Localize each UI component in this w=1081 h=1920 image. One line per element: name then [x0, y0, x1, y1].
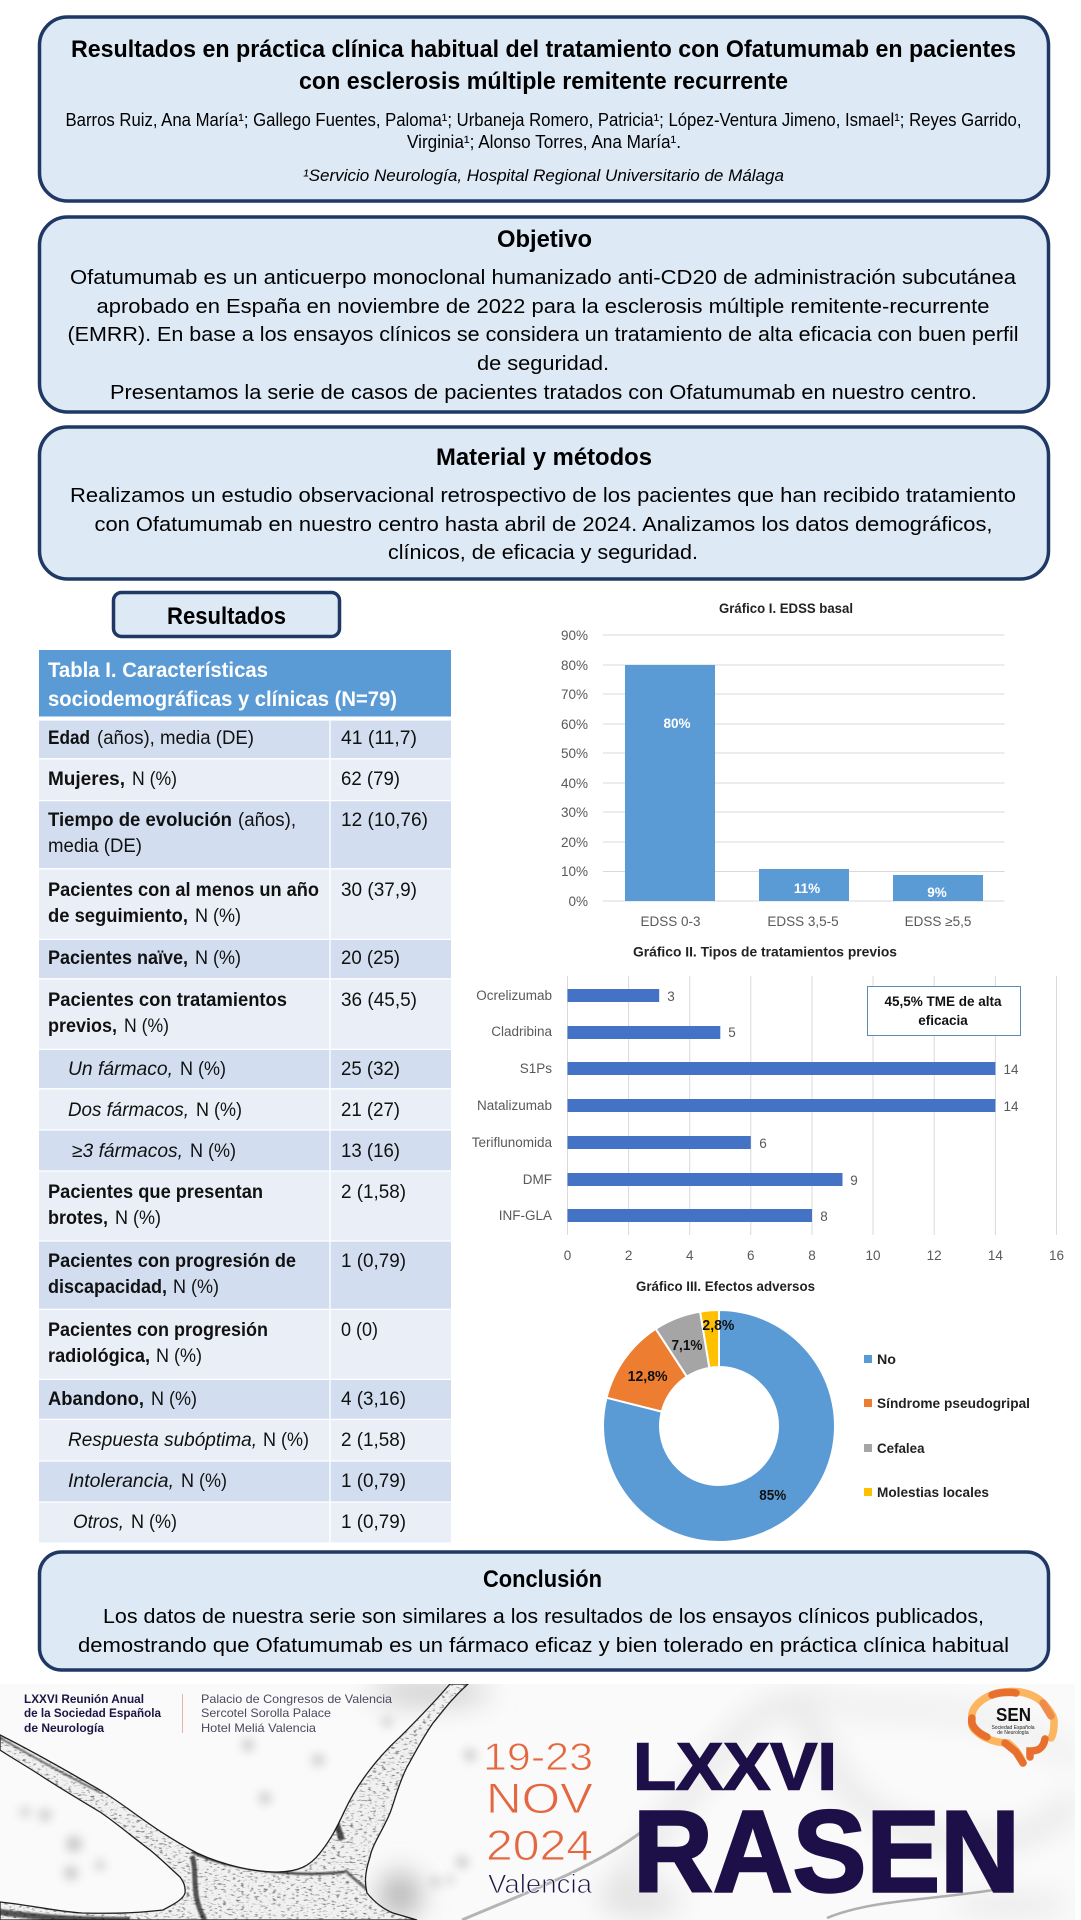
chart: EDSS basal: 70% — [561, 687, 588, 702]
text: LXXVI RASEN: LXXVI — [633, 1730, 837, 1804]
row labels: N (%) — [115, 1208, 161, 1229]
row labels: N (%) — [173, 1277, 219, 1298]
row labels — [48, 728, 319, 1533]
value labels: 8 — [820, 1209, 828, 1224]
row values: 1 (0,79) — [341, 1512, 406, 1533]
row labels: Un fármaco, — [68, 1059, 173, 1080]
x axis labels: 2 — [625, 1248, 632, 1263]
legend: No — [877, 1351, 896, 1367]
text block: authors — [66, 110, 1022, 152]
donut labels: 2,8% — [702, 1318, 734, 1334]
chart: efectos adversos — [603, 1279, 1030, 1542]
row labels: N (%) — [156, 1346, 202, 1367]
value labels — [667, 989, 1019, 1224]
row labels: radiológica, — [48, 1346, 150, 1367]
row labels: Mujeres, — [48, 769, 125, 790]
text block: objetivo — [68, 266, 1019, 404]
heading: resultados: Resultados — [167, 603, 286, 630]
donut labels — [628, 1318, 786, 1504]
row labels: N (%) — [190, 1141, 236, 1162]
x axis labels: 8 — [808, 1248, 816, 1263]
legend: Molestias locales — [877, 1484, 989, 1500]
callout: TME de alta eficacia: eficacia — [918, 1013, 968, 1028]
category labels: Ocrelizumab — [476, 988, 552, 1003]
row labels: N (%) — [132, 769, 177, 790]
text: dates: 19-23 — [483, 1736, 593, 1779]
row values: 25 (32) — [341, 1059, 400, 1080]
row labels: N (%) — [195, 906, 241, 927]
chart title: Gráfico III. Efectos adversos — [636, 1279, 815, 1294]
chart: EDSS basal: 80% — [561, 658, 588, 673]
row labels: Pacientes con progresión de — [48, 1251, 296, 1272]
row labels: Pacientes naïve, — [48, 948, 188, 969]
text block: objetivo: de seguridad. — [477, 352, 609, 375]
row labels: N (%) — [151, 1389, 197, 1410]
text: venues — [202, 1694, 392, 1732]
table header — [39, 650, 451, 716]
text block: material y metodos: clínicos, de eficacia y seguridad. — [388, 541, 698, 564]
donut labels: 85% — [759, 1488, 786, 1504]
heading: title: Resultados en práctica clínica habitual del tratamiento con Ofatumumab en pacientes — [71, 36, 1016, 63]
chart title: Gráfico I. EDSS basal — [719, 601, 853, 616]
row values: 30 (37,9) — [341, 880, 417, 901]
row labels: Dos fármacos, — [68, 1100, 189, 1121]
donut labels: 7,1% — [672, 1338, 703, 1354]
data labels: 11% — [794, 881, 820, 896]
chart: EDSS basal: 50% — [561, 746, 588, 761]
text: dates: NOV — [486, 1775, 593, 1823]
category labels: DMF — [523, 1172, 552, 1187]
text block: material y metodos — [70, 484, 1016, 564]
row labels: Abandono, — [48, 1389, 144, 1410]
text block: objetivo: (EMRR). En base a los ensayos clínicos se considera un tratamiento de alta eficacia con buen perfil — [68, 323, 1019, 346]
heading: title: con esclerosis múltiple remitente recurrente — [299, 68, 788, 95]
row values: 2 (1,58) — [341, 1182, 406, 1203]
row values: 1 (0,79) — [341, 1251, 406, 1272]
text block: affiliation: ¹Servicio Neurología, Hospital Regional Universitario de Málaga — [303, 166, 784, 185]
text block: objetivo: Ofatumumab es un anticuerpo monoclonal humanizado anti-CD20 de administración subcutánea — [70, 266, 1017, 289]
category labels: Cladribina — [491, 1024, 552, 1039]
heading: material y metodos: Material y métodos — [436, 444, 652, 471]
x axis labels: 12 — [927, 1248, 942, 1263]
row values: 1 (0,79) — [341, 1471, 406, 1492]
text: meeting name: LXXVI Reunión Anual — [24, 1692, 144, 1706]
callout: TME de alta eficacia: 45,5% TME de alta — [884, 994, 1002, 1009]
category labels: Teriflunomida — [472, 1135, 552, 1150]
x axis labels: 6 — [747, 1248, 755, 1263]
icon: SEN logo: de Neurología — [997, 1730, 1029, 1736]
table header: sociodemográficas y clínicas (N=79) — [48, 688, 397, 711]
row labels: Pacientes que presentan — [48, 1182, 263, 1203]
heading: objetivo: Objetivo — [497, 226, 592, 253]
text: dates: Valencia — [488, 1869, 593, 1899]
row labels: Pacientes con al menos un año — [48, 880, 319, 901]
row labels: N (%) — [180, 1059, 226, 1080]
row values: 20 (25) — [341, 948, 400, 969]
table: caracteristicas — [39, 650, 451, 1542]
row labels: Edad — [48, 728, 90, 749]
row values: 36 (45,5) — [341, 990, 417, 1011]
text: venues: Hotel Meliá Valencia — [201, 1721, 316, 1735]
text block: conclusion — [78, 1605, 1009, 1657]
row values — [341, 728, 428, 1533]
value labels: 5 — [728, 1025, 736, 1040]
text: meeting name: de Neurología — [24, 1721, 104, 1735]
text: meeting name — [24, 1692, 161, 1735]
row labels: (años), — [238, 810, 296, 831]
row labels: N (%) — [195, 948, 241, 969]
text: dates: 2024 — [486, 1822, 593, 1870]
value labels: 14 — [1003, 1099, 1019, 1114]
heading: resultados — [114, 592, 340, 636]
category labels: Natalizumab — [477, 1098, 552, 1113]
text: LXXVI RASEN — [636, 1742, 1014, 1894]
panel: objetivo — [40, 217, 1048, 412]
text block: authors: Barros Ruiz, Ana María¹; Gallego Fuentes, Paloma¹; Urbaneja Romero, Patricia¹; López-Ventura Jimeno, Ismael¹; Reyes Garrido, — [66, 110, 1022, 130]
row values: 13 (16) — [341, 1141, 400, 1162]
value labels: 14 — [1003, 1062, 1019, 1077]
row values: 0 (0) — [341, 1320, 378, 1341]
x axis labels — [564, 1248, 1064, 1263]
chart: EDSS basal — [561, 601, 1004, 929]
x axis labels: 14 — [988, 1248, 1003, 1263]
data labels: 80% — [663, 716, 691, 731]
text: venues: Sercotel Sorolla Palace — [201, 1706, 331, 1720]
category labels — [472, 988, 552, 1223]
chart: EDSS basal: 10% — [561, 864, 588, 879]
icon: neuron — [0, 1684, 993, 1920]
row values: 2 (1,58) — [341, 1430, 406, 1451]
legend — [864, 1351, 1030, 1500]
text: venues: Palacio de Congresos de Valencia — [201, 1692, 392, 1706]
heading: title — [71, 36, 1016, 95]
chart: EDSS basal: 60% — [561, 717, 588, 732]
icon: SEN logo: SEN — [996, 1705, 1031, 1725]
category labels: S1Ps — [520, 1061, 552, 1076]
row labels: previos, — [48, 1016, 117, 1037]
text block: objetivo: Presentamos la serie de casos de pacientes tratados con Ofatumumab en nuestro centro. — [110, 381, 977, 404]
row labels: Pacientes con progresión — [48, 1320, 268, 1341]
x axis labels: 16 — [1049, 1248, 1064, 1263]
bars — [625, 665, 983, 901]
x axis labels: 4 — [686, 1248, 694, 1263]
text block: conclusion: demostrando que Ofatumumab es un fármaco eficaz y bien tolerado en práctica clínica habitual — [78, 1634, 1009, 1657]
text: dates — [486, 1743, 592, 1894]
chart: EDSS basal: 20% — [561, 835, 588, 850]
data labels: 9% — [927, 885, 947, 900]
row values: 62 (79) — [341, 769, 400, 790]
row values: 4 (3,16) — [341, 1389, 406, 1410]
chart title: Gráfico II. Tipos de tratamientos previos — [633, 944, 897, 960]
row labels: N (%) — [196, 1100, 242, 1121]
row labels: discapacidad, — [48, 1277, 167, 1298]
x axis labels: 0 — [564, 1248, 571, 1263]
row labels: Tiempo de evolución — [48, 810, 232, 831]
heading: conclusion: Conclusión — [483, 1566, 602, 1593]
category labels: INF-GLA — [499, 1208, 552, 1223]
row labels: Intolerancia, — [68, 1471, 174, 1492]
x axis labels: 10 — [865, 1248, 881, 1263]
chart: tipos de tratamientos previos — [472, 944, 1064, 1263]
row labels: Otros, — [73, 1512, 124, 1533]
bars — [568, 989, 995, 1222]
row labels: brotes, — [48, 1208, 108, 1229]
chart: EDSS basal: 90% — [561, 628, 588, 643]
text block: conclusion: Los datos de nuestra serie son similares a los resultados de los ensayos clínicos publicados, — [103, 1605, 984, 1628]
row labels: ≥3 fármacos, — [72, 1141, 183, 1162]
row labels: Respuesta subóptima, — [68, 1430, 257, 1451]
category labels — [640, 914, 971, 929]
row labels: N (%) — [124, 1016, 169, 1037]
row values: 21 (27) — [341, 1100, 400, 1121]
value labels: 9 — [850, 1173, 858, 1188]
banner: congreso RASEN — [0, 1680, 1075, 1920]
row labels: N (%) — [263, 1430, 309, 1451]
legend: Cefalea — [877, 1440, 925, 1456]
panel: conclusion — [40, 1552, 1048, 1670]
table header: Tabla I. Características — [48, 659, 268, 682]
donut — [603, 1310, 835, 1542]
category labels: EDSS 0-3 — [640, 914, 701, 929]
data labels — [663, 716, 947, 900]
row values: 41 (11,7) — [341, 728, 417, 749]
panel: title — [40, 17, 1048, 201]
category labels: EDSS ≥5,5 — [905, 914, 971, 929]
legend: Síndrome pseudogripal — [877, 1395, 1030, 1411]
row labels: media (DE) — [48, 836, 142, 857]
icon: SEN logo — [972, 1691, 1054, 1763]
chart: EDSS basal: 40% — [561, 776, 588, 791]
callout: TME de alta eficacia — [868, 986, 1020, 1036]
text: LXXVI RASEN: RASEN — [633, 1786, 1020, 1916]
text block: objetivo: aprobado en España en noviembre de 2022 para la esclerosis múltiple remitente-recurrente — [96, 295, 990, 318]
icon: SEN logo: Sociedad Española — [991, 1725, 1035, 1731]
row labels: Pacientes con tratamientos — [48, 990, 287, 1011]
value labels: 6 — [759, 1136, 767, 1151]
text block: material y metodos: con Ofatumumab en nuestro centro hasta abril de 2024. Analizamos los datos demográficos, — [94, 513, 993, 536]
panel: material y metodos — [40, 427, 1048, 579]
text: meeting name: de la Sociedad Española — [24, 1706, 161, 1720]
row labels: de seguimiento, — [48, 906, 188, 927]
row labels: N (%) — [131, 1512, 177, 1533]
text block: material y metodos: Realizamos un estudio observacional retrospectivo de los pacientes que han recibido tratamiento — [70, 484, 1016, 507]
chart: EDSS basal: 0% — [568, 894, 588, 909]
row values: 12 (10,76) — [341, 810, 428, 831]
row labels: (años), media (DE) — [97, 728, 254, 749]
chart: EDSS basal: 30% — [561, 805, 588, 820]
text block: authors: Virginia¹; Alonso Torres, Ana María¹. — [407, 132, 681, 152]
value labels: 3 — [667, 989, 675, 1004]
category labels: EDSS 3,5-5 — [767, 914, 839, 929]
row labels: N (%) — [181, 1471, 227, 1492]
donut labels: 12,8% — [628, 1369, 668, 1385]
